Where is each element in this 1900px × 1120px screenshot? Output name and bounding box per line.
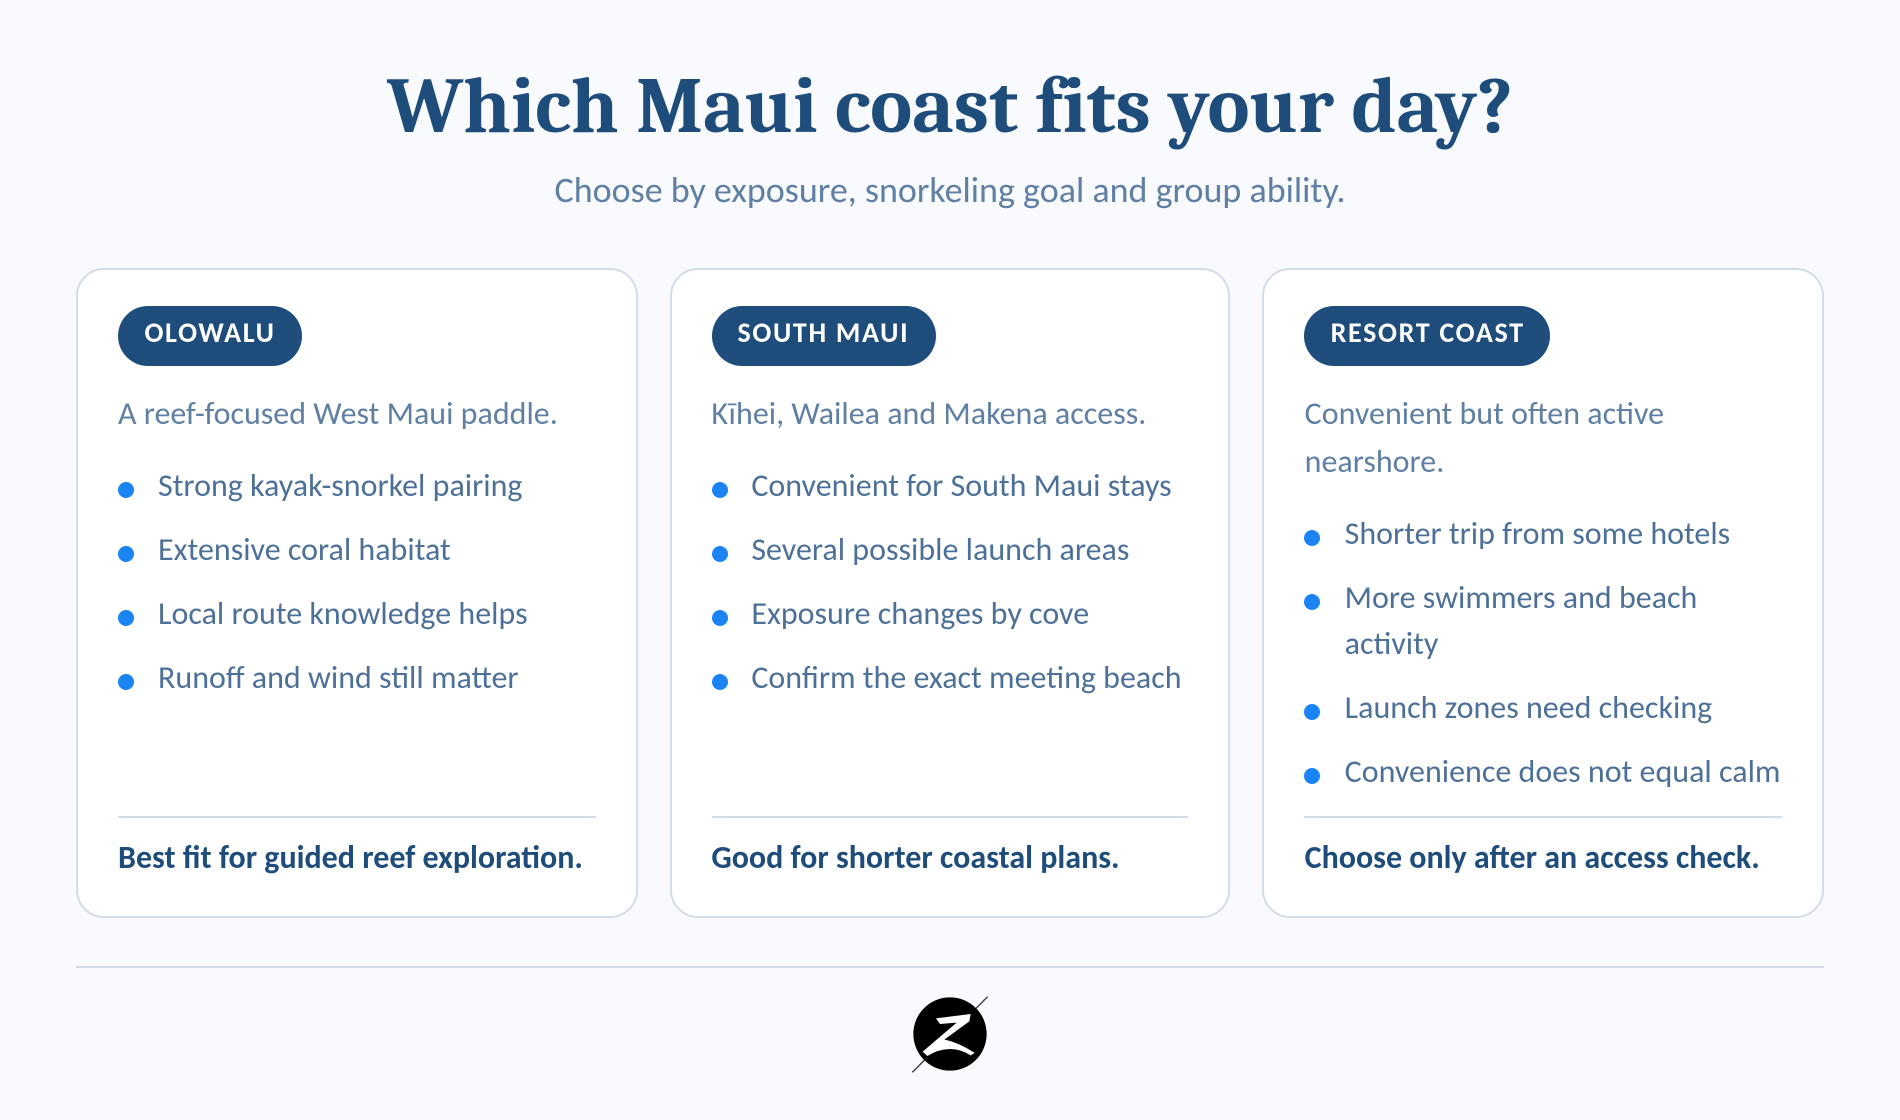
description (1305, 394, 1664, 481)
list item: More swimmers and beach (1345, 578, 1697, 617)
list item: Extensive coral habitat (158, 530, 451, 569)
list item: Confirm the exact meeting beach (751, 658, 1182, 697)
description: Convenient but often active (1305, 394, 1664, 433)
description: Kīhei, Wailea and Makena access. (711, 394, 1146, 433)
list item: Strong kayak-snorkel pairing (158, 466, 522, 505)
badge: South Maui: SOUTH MAUI (737, 315, 909, 350)
panel: Olowalu (76, 268, 638, 918)
list item: Convenience does not equal calm (1345, 752, 1780, 791)
badge: South Maui (712, 306, 936, 366)
list item: Local route knowledge helps (158, 594, 528, 633)
list item: Exposure changes by cove (751, 594, 1089, 633)
panel: South Maui (670, 268, 1230, 918)
verdict: Choose only after an access check. (1305, 838, 1760, 877)
list item: Runoff and wind still matter (158, 658, 519, 697)
badge: Resort Coast: RESORT COAST (1331, 315, 1525, 350)
panel: Resort Coast (1262, 268, 1824, 918)
list item: Shorter trip from some hotels (1345, 514, 1730, 553)
list item: Launch zones need checking (1345, 688, 1712, 727)
verdict: Good for shorter coastal plans. (711, 838, 1120, 877)
list item (1304, 578, 1697, 663)
title: Which Maui coast fits your day? (387, 61, 1513, 152)
list item: activity (1345, 624, 1438, 663)
subtitle: Choose by exposure, snorkeling goal and group ability. (555, 168, 1345, 212)
icon: Z logo (912, 996, 988, 1073)
description: nearshore. (1305, 442, 1444, 481)
description: A reef-focused West Maui paddle. (118, 394, 558, 433)
badge: Olowalu: OLOWALU (144, 315, 276, 350)
list item: Several possible launch areas (751, 530, 1129, 569)
badge: Resort Coast (1304, 306, 1550, 366)
badge: Olowalu (118, 306, 302, 366)
list item: Convenient for South Maui stays (751, 466, 1172, 505)
verdict: Best fit for guided reef exploration. (118, 838, 583, 877)
